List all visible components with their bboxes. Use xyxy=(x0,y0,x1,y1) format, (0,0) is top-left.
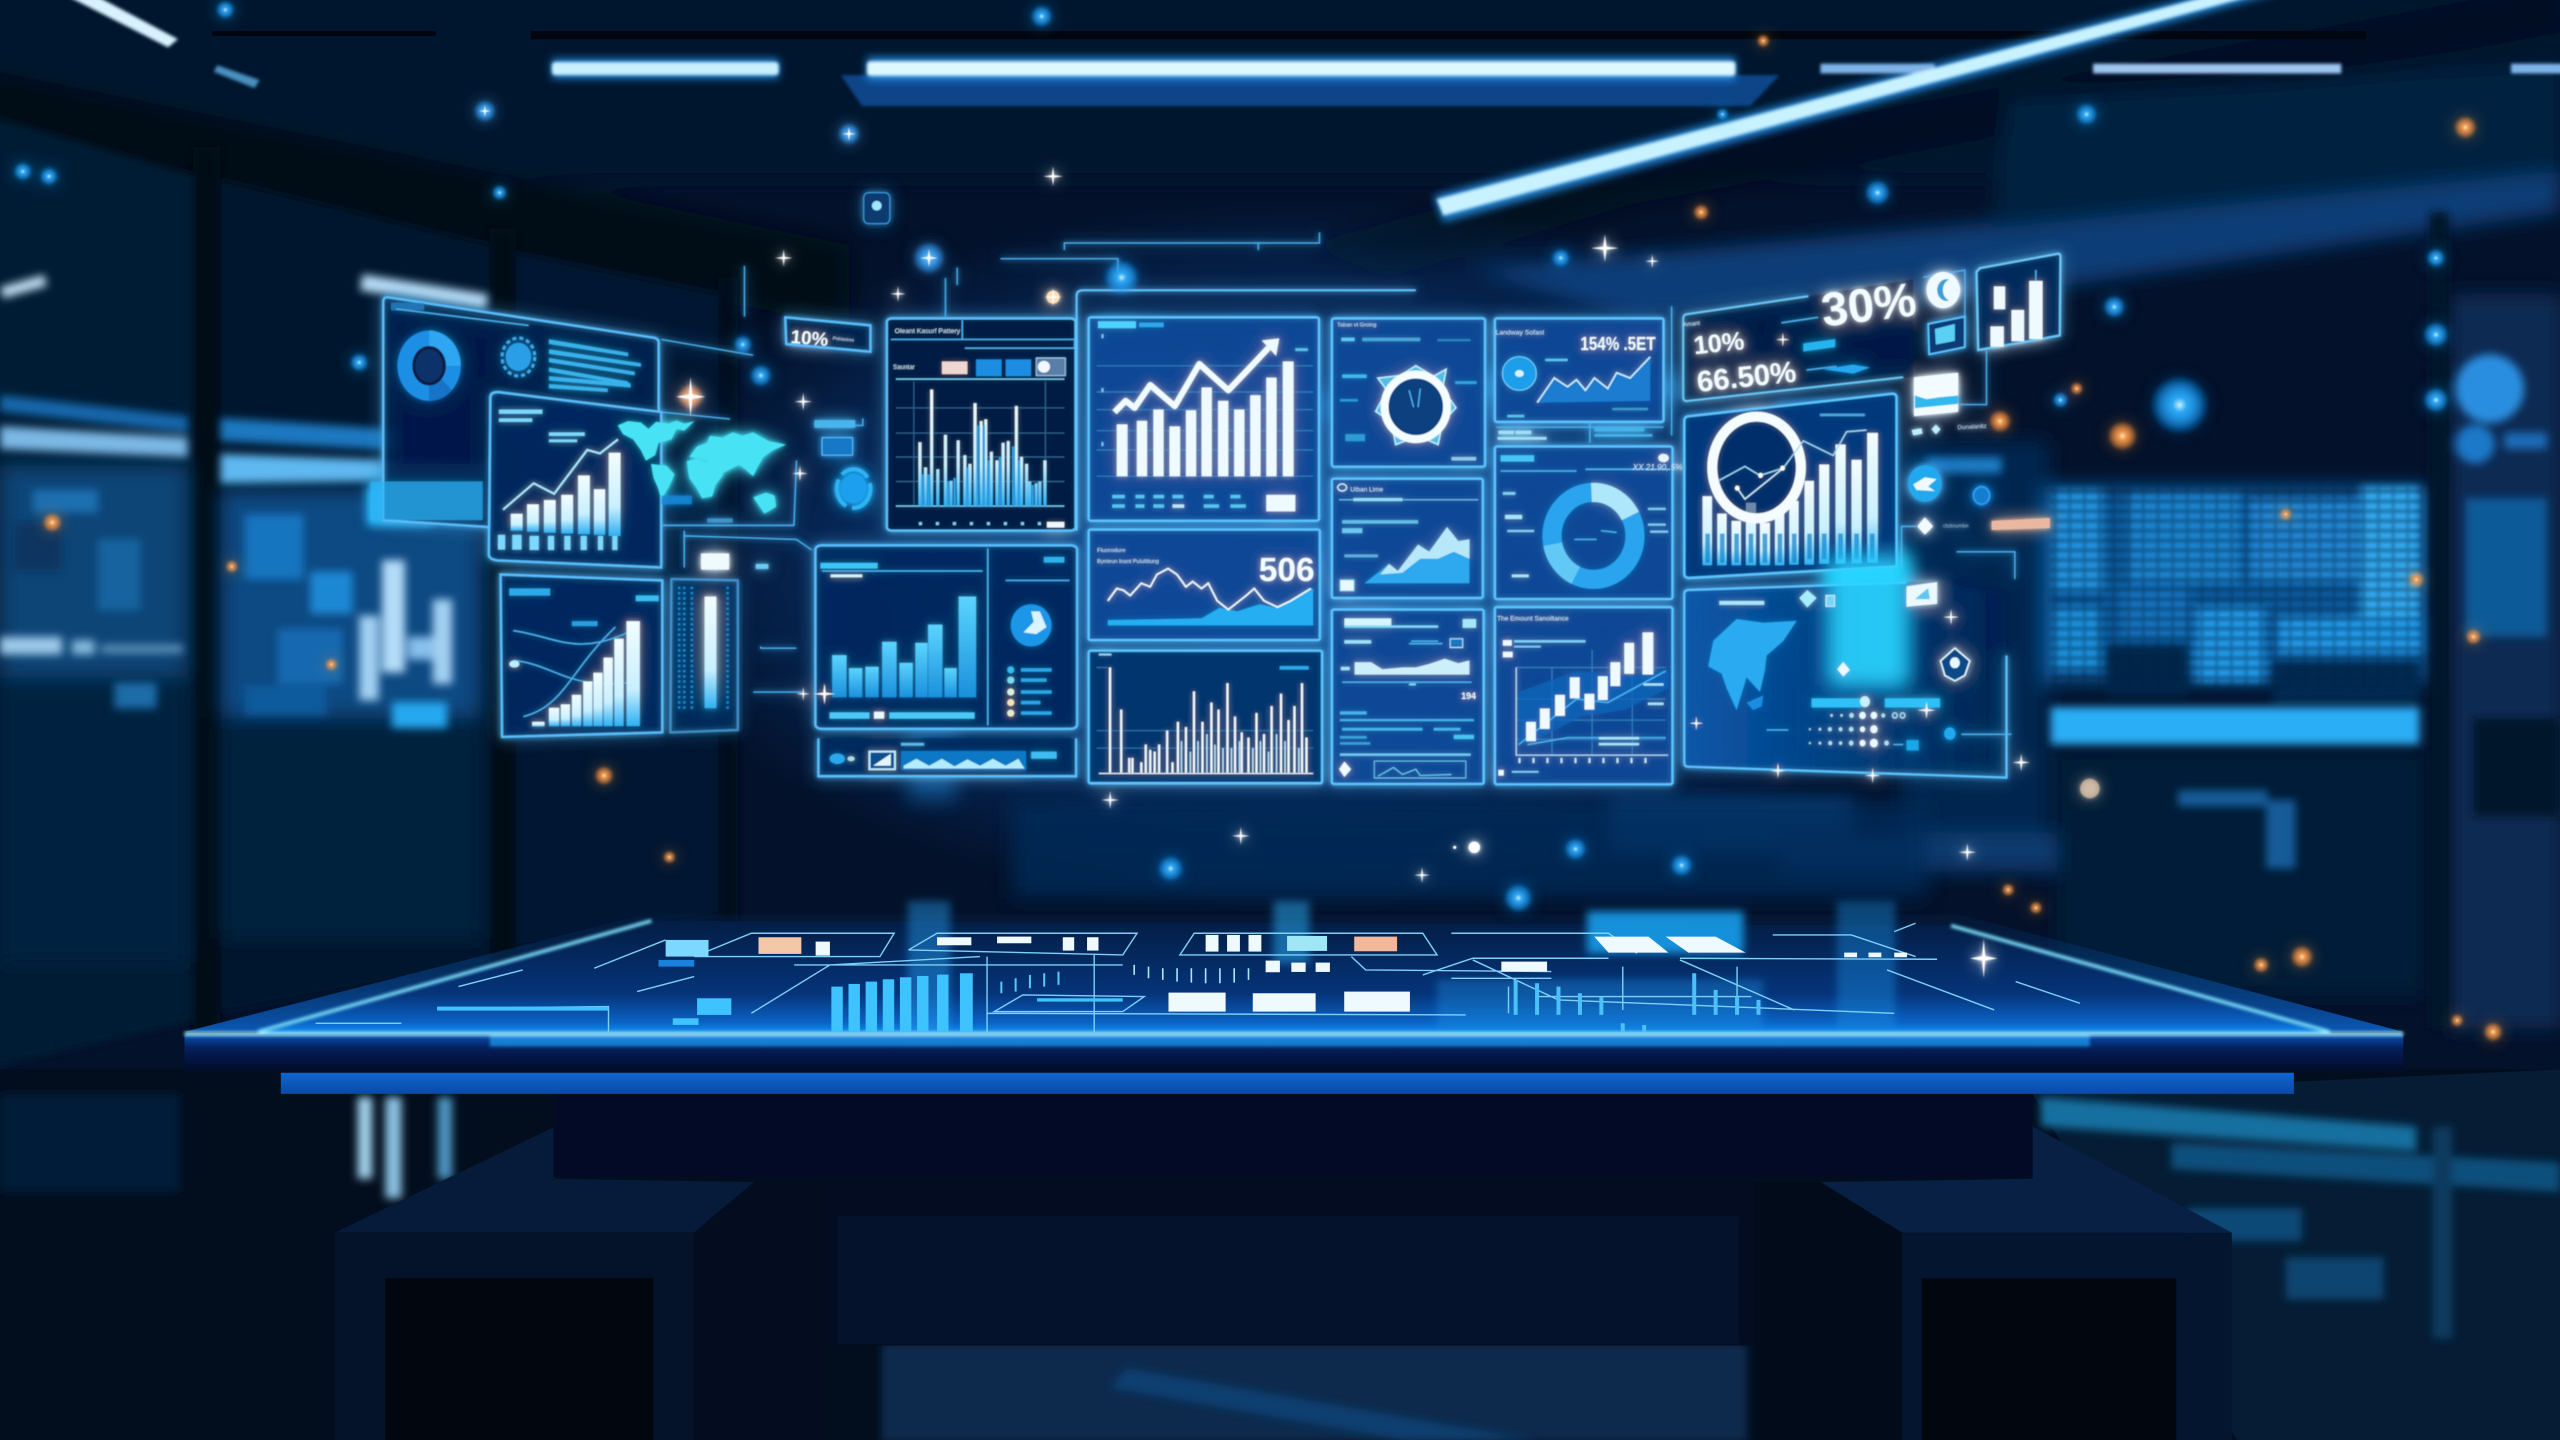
icon: gear xyxy=(502,338,535,376)
table bevel xyxy=(184,914,2403,1032)
small icon: target above panels xyxy=(864,193,890,224)
panel: donut and list (left rear) xyxy=(370,297,659,527)
bar chart xyxy=(511,453,620,536)
panel: candlestick chart: The Emount Sanoiltance xyxy=(1497,615,1569,622)
icon: gear gauge xyxy=(1376,366,1456,445)
panel: donut chart xyxy=(1495,446,1683,599)
panel: 506 line chart xyxy=(1089,530,1320,640)
circuit lines xyxy=(316,923,2080,1032)
panel: mountain area xyxy=(1332,479,1483,598)
panel: spike chart: Sauntar xyxy=(893,364,915,371)
icon: white tile xyxy=(1907,582,1937,607)
panel: mountain area: Uiban Lime xyxy=(1350,486,1384,493)
small icons right of ring chart: Dunalanitz xyxy=(1957,423,1987,431)
panel: main bar chart with arrow xyxy=(1089,317,1319,521)
panel: KPI percentages: Amant xyxy=(1683,321,1701,329)
panel: candlestick chart xyxy=(1495,607,1672,784)
panel: mini bar chart xyxy=(1977,254,2060,350)
icon: drop in circle xyxy=(1502,357,1536,390)
sparkles: white stars xyxy=(479,105,2030,978)
ceiling shading xyxy=(0,0,2560,327)
panel: KPI percentages xyxy=(1672,273,1919,435)
axis labels xyxy=(1112,495,1246,508)
chip: 10%: 10% xyxy=(790,326,829,350)
icon: burst xyxy=(1044,288,1062,306)
ring with trend line xyxy=(1712,417,1867,518)
bars xyxy=(1117,362,1294,476)
panel: donut chart: XX 21.90,.5% xyxy=(1632,463,1683,472)
panel: gear gauge xyxy=(1332,318,1485,467)
value 10%: 10% xyxy=(1692,327,1746,360)
central glow xyxy=(620,196,1992,914)
icon: white area tile xyxy=(1914,373,1958,416)
tile: bright blocks xyxy=(437,935,1907,1025)
blurred right shelves xyxy=(1608,294,2560,1029)
left windows xyxy=(0,114,738,1069)
table body xyxy=(553,1094,2033,1177)
value 30%: 30% xyxy=(1819,273,1919,337)
panel: 506 line chart: Bynteun Inant Pulultitung xyxy=(1097,559,1159,565)
tile: bar chart xyxy=(831,965,1758,1032)
table front edge xyxy=(184,1035,2403,1073)
value 506: 506 xyxy=(1259,552,1315,589)
chip: 10% xyxy=(785,317,870,352)
table-top hologram layout xyxy=(184,901,2403,1047)
table surface xyxy=(258,921,2330,1033)
centre box xyxy=(824,1182,1755,1345)
panel: gear gauge: Taban vt Groing xyxy=(1337,323,1376,329)
trend arrow xyxy=(1115,338,1279,412)
panel: mini strip xyxy=(818,738,1076,776)
panel: bars and pie xyxy=(815,545,1077,729)
panel: chart with world map xyxy=(489,392,796,567)
edge lines xyxy=(184,921,2403,1047)
table and stools xyxy=(0,914,2560,1440)
icon: web gear xyxy=(1941,648,1970,681)
donut xyxy=(1552,492,1635,579)
sparkles: blue halos xyxy=(13,0,2449,913)
panel: tall bar list xyxy=(670,536,812,732)
ceiling lights xyxy=(69,0,2560,222)
panel: spike histogram xyxy=(1089,651,1322,783)
light columns xyxy=(908,901,1896,1032)
blurred left blocks xyxy=(0,465,482,963)
panel: spike chart: Oleant Kasurf Pattery xyxy=(895,328,961,335)
legend xyxy=(1007,666,1052,717)
left stool xyxy=(335,1127,824,1440)
holographic dashboard xyxy=(13,0,2503,1042)
panel: world map and dots xyxy=(1683,555,2012,778)
world map xyxy=(618,420,786,514)
panel: 506 line chart: Fluorodure xyxy=(1097,548,1125,554)
small icons right of ring chart xyxy=(1902,373,2050,579)
floor xyxy=(0,1069,2560,1440)
header buttons xyxy=(942,358,1065,376)
list bars xyxy=(549,339,641,392)
panel: spike chart xyxy=(887,318,1076,531)
panel: table list xyxy=(1332,610,1484,784)
light column xyxy=(1829,555,1907,686)
shelf stripes xyxy=(2051,487,2423,691)
value 154%: 154% .5ET xyxy=(1580,333,1656,354)
panel: 154% area chart xyxy=(1495,318,1664,443)
small icons right of ring chart: ctutoumbe xyxy=(1943,523,1969,529)
dots xyxy=(1809,712,1905,747)
sparkles: orange halos xyxy=(42,34,2503,1042)
right shelf detail xyxy=(1776,212,2560,1029)
legend bars xyxy=(1812,698,1862,707)
panel: 154% area chart: Landway Sofast xyxy=(1496,330,1544,337)
table blue band xyxy=(281,1073,2294,1094)
small widgets beside map xyxy=(753,418,870,692)
panel: rising bars xyxy=(501,575,662,737)
icon: bug circle xyxy=(1908,465,1942,502)
left texture blocks xyxy=(0,274,490,728)
bars xyxy=(1703,433,1878,565)
frame around main column xyxy=(1077,290,1416,531)
connector lines above panels xyxy=(661,232,1319,355)
value 66.50%: 66.50% xyxy=(1695,356,1798,399)
value label: 194 xyxy=(1461,691,1476,701)
right stool xyxy=(1755,1127,2232,1440)
icon: donut xyxy=(397,331,461,401)
chip: 10%: Pokiaoinni xyxy=(833,336,854,343)
panel: ring and bars xyxy=(1684,394,1897,578)
map blob xyxy=(1708,619,1797,710)
icons beside 30% xyxy=(1923,270,1987,405)
icon: pie xyxy=(1011,604,1052,646)
